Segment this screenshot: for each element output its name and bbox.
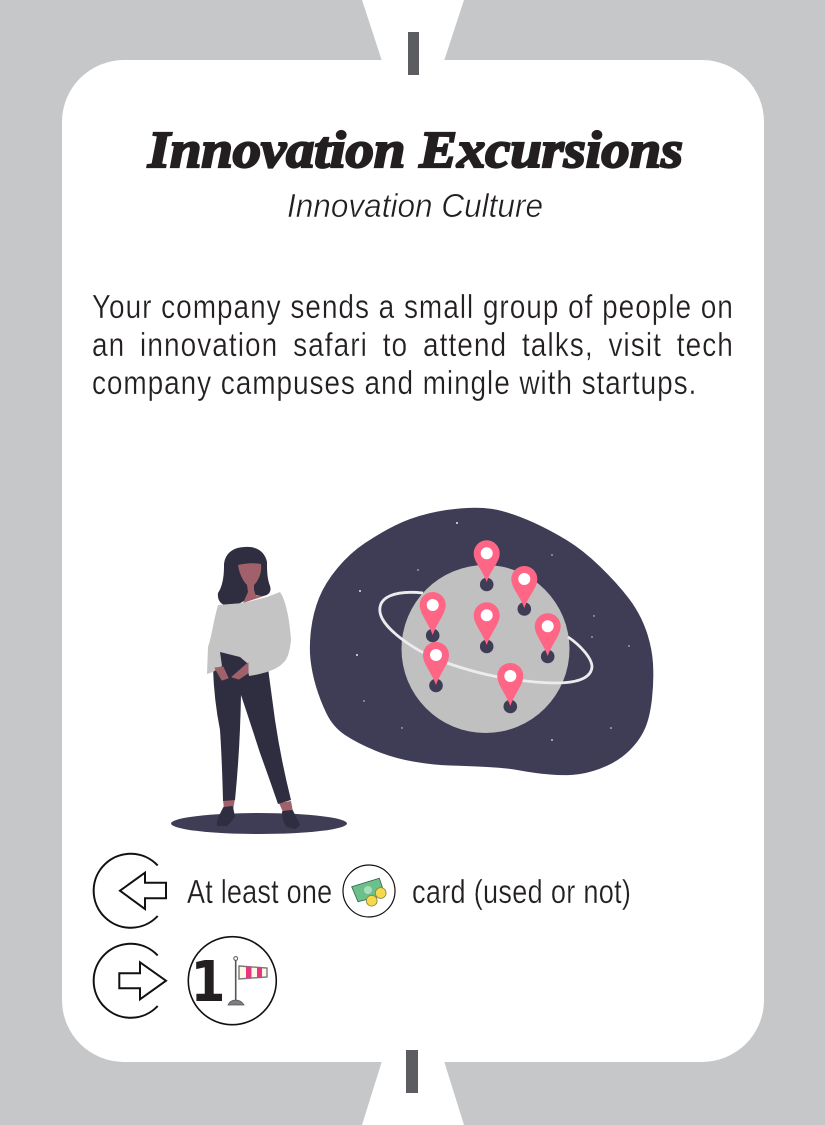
planet ring — [380, 592, 592, 683]
shoes — [218, 807, 299, 828]
icon: wind effect badge — [188, 937, 276, 1025]
description text: an innovation safari to attend talks, visit tech — [92, 327, 733, 364]
sweater — [207, 592, 291, 676]
top connector bar — [408, 32, 419, 75]
title: Innovation Excursions — [147, 122, 683, 179]
prerequisite row — [94, 854, 631, 928]
neck and face — [238, 563, 264, 603]
icon: output arrow — [94, 944, 166, 1018]
ankles — [223, 799, 293, 812]
location pins — [420, 540, 561, 713]
icon: money card — [343, 865, 395, 917]
hair — [218, 547, 271, 606]
prerequisite text: At least one — [187, 875, 332, 911]
illustration: standing woman — [171, 547, 347, 834]
trousers — [213, 668, 291, 804]
planet — [402, 565, 570, 733]
description text — [92, 289, 733, 402]
illustration: planet with location pins — [310, 508, 653, 775]
icon: wind effect badge: 1 — [190, 950, 226, 1015]
hands — [215, 663, 248, 680]
ground shadow — [171, 813, 347, 834]
subtitle: Innovation Culture — [287, 187, 543, 224]
space blob — [310, 508, 653, 775]
stars — [356, 522, 630, 741]
outcome row — [94, 937, 276, 1025]
description text: Your company sends a small group of people on — [92, 289, 733, 326]
bottom connector bar — [406, 1050, 418, 1093]
card label text: card (used or not) — [412, 875, 631, 911]
icon: input arrow — [94, 854, 166, 928]
description text: company campuses and mingle with startups. — [92, 365, 696, 402]
